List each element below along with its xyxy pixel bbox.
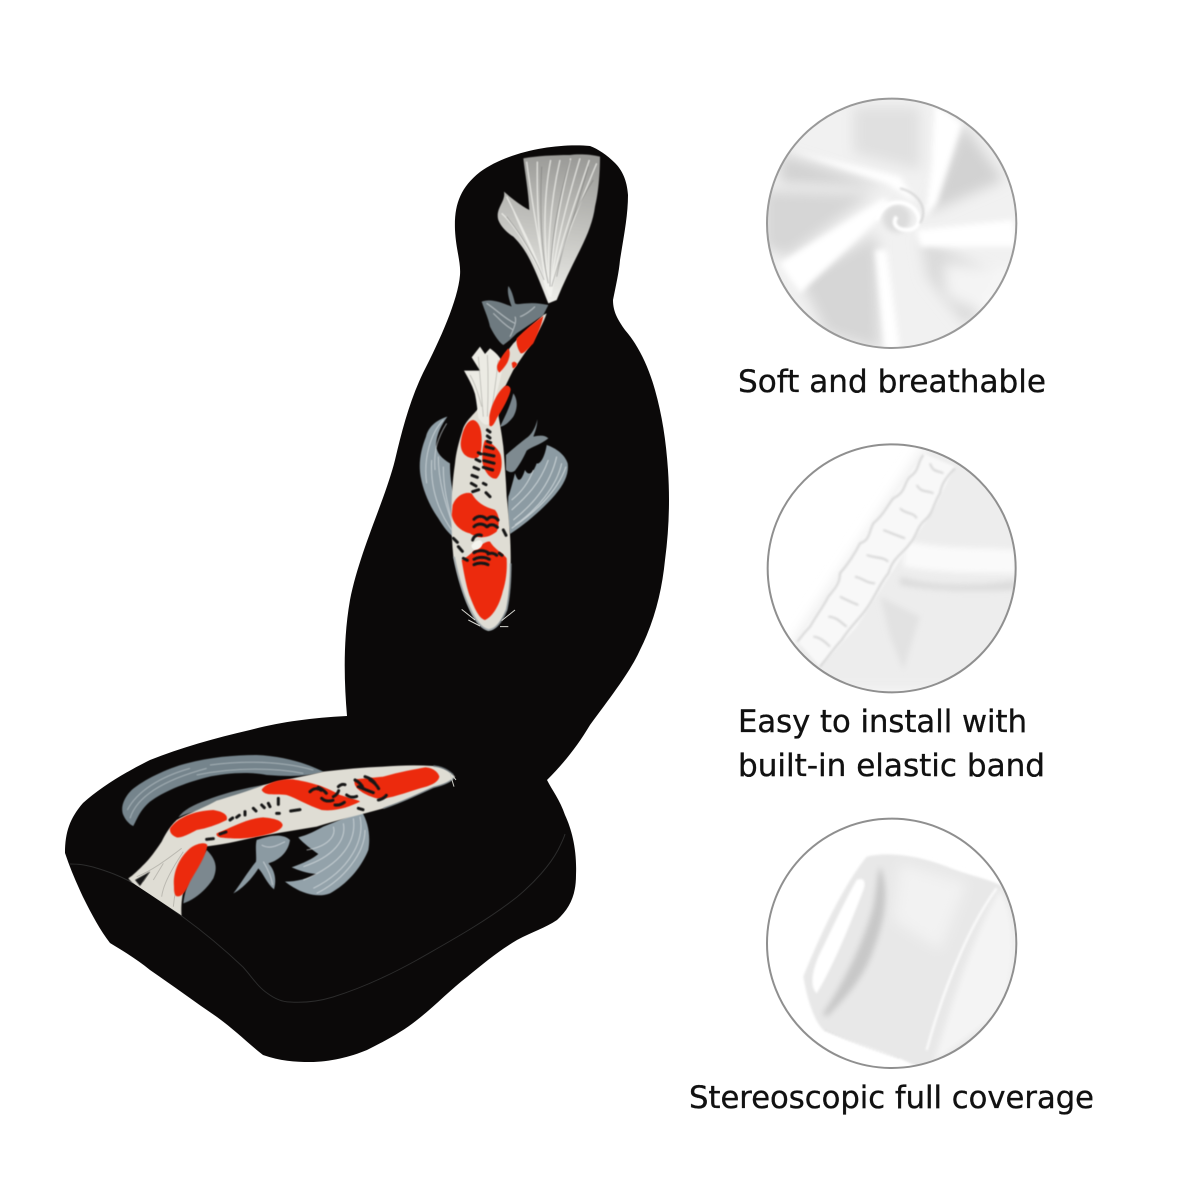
lower twisted fin xyxy=(233,836,290,893)
label: stereoscopic full coverage: Stereoscopic full coverage xyxy=(689,1080,1094,1116)
inner upper fin xyxy=(178,785,263,817)
koi fish on backrest xyxy=(420,154,600,631)
rear lower fin xyxy=(183,850,216,903)
red patches xyxy=(170,767,439,896)
left pectoral fin xyxy=(420,417,456,537)
lower large fin xyxy=(285,812,369,895)
tail feather strokes xyxy=(136,848,184,907)
label: easy to install: built-in elastic band xyxy=(738,748,1045,784)
swatch: headrest cover xyxy=(767,819,1016,1068)
label: easy to install: Easy to install with xyxy=(738,704,1027,740)
dark tail gap xyxy=(135,872,150,886)
seat seam line xyxy=(70,834,565,1002)
right pectoral fin xyxy=(508,445,568,534)
barbels xyxy=(462,609,515,627)
barbels xyxy=(450,773,456,787)
swatch: swirled fabric xyxy=(763,99,1017,350)
head highlight xyxy=(471,540,482,550)
rear small fin xyxy=(500,393,517,427)
feature: elastic band xyxy=(738,443,1045,784)
red patches xyxy=(452,316,543,620)
label: soft and breathable: Soft and breathable xyxy=(738,364,1046,400)
head edge shading xyxy=(454,557,511,630)
head edge xyxy=(383,766,454,808)
car seat cover xyxy=(65,145,669,1062)
feature: full coverage xyxy=(689,819,1094,1116)
black scale markings xyxy=(207,777,386,839)
tail fin xyxy=(498,154,600,303)
seat silhouette xyxy=(65,145,669,1062)
fish body xyxy=(452,313,547,631)
dorsal feather fin xyxy=(464,347,503,425)
fish body xyxy=(128,765,455,918)
black scale markings xyxy=(453,430,506,565)
rear ventral fin xyxy=(482,286,548,345)
label: easy to install xyxy=(738,704,1045,784)
feature: soft and breathable xyxy=(738,99,1046,400)
ventral fin xyxy=(506,419,548,472)
long upper fin xyxy=(122,755,323,826)
koi fish on seat cushion xyxy=(122,755,456,918)
swatch: elastic band fabric xyxy=(768,443,1027,693)
